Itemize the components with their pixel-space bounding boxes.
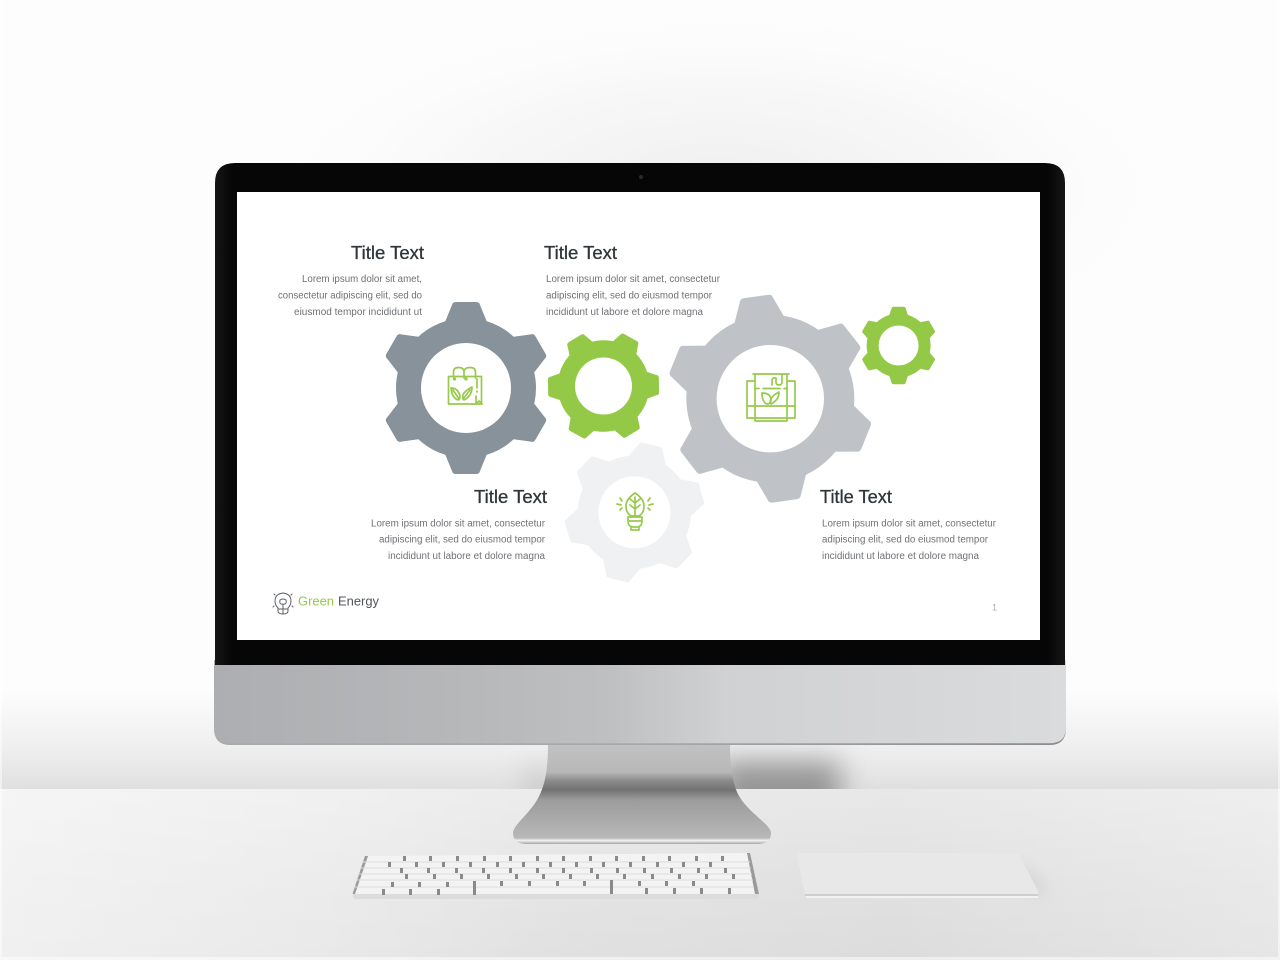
stand shadow on wall [522, 745, 857, 789]
title block: bottom right: incididunt ut labore et dolore magna [822, 551, 979, 562]
title block: bottom right [820, 487, 997, 562]
title block: top left: Title Text [351, 243, 424, 263]
title block: top left: eiusmod tempor incididunt ut [294, 307, 422, 318]
title block: bottom left: Title Text [474, 487, 547, 507]
monitor bezel [215, 163, 1065, 665]
title block: bottom right: Title Text [820, 487, 892, 507]
title block: top centre: adipiscing elit, sed do eiusmod tempor [546, 290, 713, 302]
title block: top centre: Title Text [544, 243, 617, 263]
title block: top left: consectetur adipiscing elit, sed do [278, 290, 422, 302]
monitor stand [513, 744, 771, 844]
gear: small green [860, 307, 937, 384]
gear: dark grey with bag icon [381, 302, 551, 474]
gear: large light grey with barrel icon [655, 282, 886, 515]
title block: top centre [544, 243, 721, 318]
icon: bio fuel barrels [747, 374, 795, 421]
logo: Green Energy [273, 593, 379, 614]
page number: 1 [992, 602, 997, 612]
icon: shopping bag with leaves [448, 368, 482, 404]
gear: pale grey with leaf bulb icon [550, 428, 719, 597]
slide screen [237, 192, 1040, 640]
title block: bottom left [371, 487, 547, 562]
title block: top left: Lorem ipsum dolor sit amet, [302, 274, 422, 285]
title block: bottom left: incididunt ut labore et dolore magna [388, 551, 545, 562]
keyboard [352, 853, 759, 899]
title block: top centre: Lorem ipsum dolor sit amet, consectetur [546, 274, 721, 285]
gear: medium green [529, 311, 678, 461]
webcam [639, 175, 643, 179]
chin lower edge [214, 728, 1066, 745]
title block: bottom left: adipiscing elit, sed do eiusmod tempor [379, 534, 546, 546]
logo: Green Energy: Energy [338, 594, 379, 608]
icon: light bulb [273, 593, 293, 614]
keyboard keys gaps [382, 856, 735, 895]
title block: top centre: incididunt ut labore et dolore magna [546, 307, 703, 318]
trackpad shadow [1020, 862, 1046, 893]
title block: bottom left: Lorem ipsum dolor sit amet, consectetur [371, 518, 546, 530]
title block: bottom right: adipiscing elit, sed do eiusmod tempor [822, 534, 989, 546]
icon: leaf in pot [617, 493, 653, 530]
title block: bottom right: Lorem ipsum dolor sit amet, consectetur [822, 518, 997, 530]
desk surface [0, 789, 1280, 960]
logo: Green Energy: Green [298, 594, 334, 608]
title block: top left [278, 243, 424, 318]
monitor chin [214, 660, 1066, 744]
trackpad [797, 853, 1038, 898]
